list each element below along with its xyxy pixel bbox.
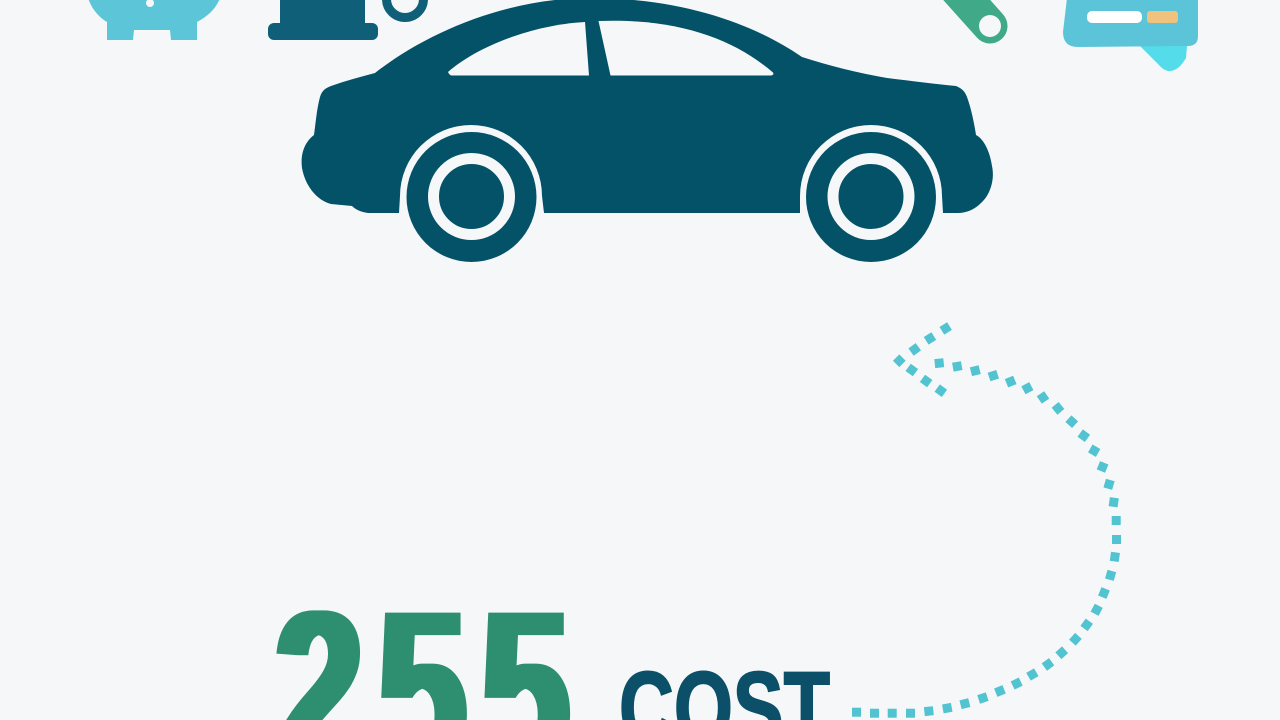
front side window	[598, 21, 773, 76]
icon: wrench	[956, 0, 1001, 37]
icon: piggy bank	[88, 0, 220, 40]
icon: chat bubble	[1063, 0, 1198, 71]
dotted arrow	[852, 322, 1121, 718]
icon: fuel pump	[268, 0, 424, 40]
icon: car silhouette	[302, 0, 993, 262]
rear side window	[448, 22, 589, 76]
rear wheel	[406, 132, 536, 262]
front wheel	[806, 132, 936, 262]
